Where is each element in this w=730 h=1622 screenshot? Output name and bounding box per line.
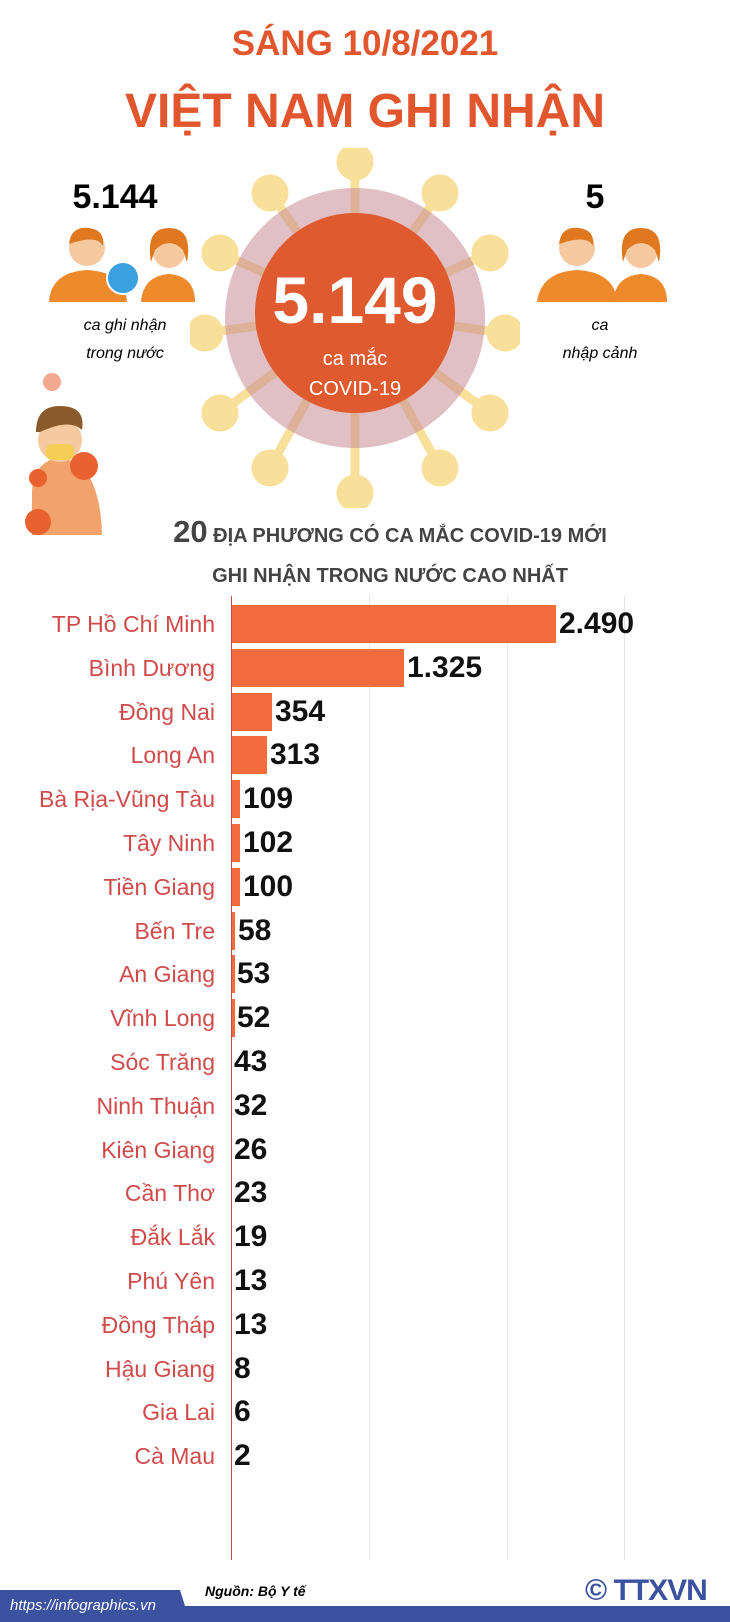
bars: 354 [275, 695, 325, 728]
bars: Tiền Giang [103, 874, 215, 900]
bars: 2.490 [559, 607, 634, 640]
bars: Sóc Trăng [110, 1049, 215, 1075]
bars: 6 [234, 1395, 251, 1428]
bars: 13 [234, 1308, 267, 1341]
logo: TTXVN: © TTXVN [585, 1574, 707, 1607]
bars: 52 [237, 1001, 270, 1034]
bars: 32 [234, 1089, 267, 1122]
bars: 313 [270, 738, 320, 771]
footer url tab [0, 1590, 185, 1613]
bars: 2 [234, 1439, 251, 1472]
bars: Đồng Nai [119, 699, 215, 725]
bars: Bến Tre [134, 918, 215, 944]
bars: 8 [234, 1352, 251, 1385]
bars: 58 [238, 914, 271, 947]
total caption: ca mắc [323, 348, 387, 370]
title: main: VIỆT NAM GHI NHẬN [125, 85, 605, 138]
bars: Ninh Thuận [96, 1093, 215, 1119]
total caption [309, 347, 401, 400]
virus graphic with total [190, 148, 520, 508]
bars: 26 [234, 1133, 267, 1166]
bars: 19 [234, 1220, 267, 1253]
bars: Long An [131, 742, 215, 768]
bars: 102 [243, 826, 293, 859]
bars: 13 [234, 1264, 267, 1297]
domestic caption: trong nước [86, 345, 164, 362]
footer url tab: https://infographics.vn [10, 1597, 156, 1614]
domestic caption: ca ghi nhận [84, 317, 166, 334]
bars: 53 [237, 957, 270, 990]
bars: Bình Dương [89, 655, 215, 681]
bars: Đắk Lắk [131, 1224, 215, 1250]
icon: imported people [537, 228, 667, 302]
title: date: SÁNG 10/8/2021 [232, 24, 498, 63]
bars: 100 [243, 870, 293, 903]
bars: Tây Ninh [123, 830, 215, 856]
bars: Đồng Tháp [102, 1312, 215, 1338]
bars: Cà Mau [134, 1443, 215, 1469]
bar chart [231, 596, 625, 1560]
chart heading: 20 ĐỊA PHƯƠNG CÓ CA MẮC COVID-19 MỚI [173, 514, 607, 549]
bars: 43 [234, 1045, 267, 1078]
bars: Gia Lai [142, 1399, 215, 1425]
imported caption [562, 317, 637, 362]
imported caption: ca [592, 317, 608, 334]
bars: Kiên Giang [101, 1137, 215, 1163]
bars: TP Hồ Chí Minh [52, 611, 215, 637]
imported caption: nhập cảnh [563, 345, 637, 362]
bars: Phú Yên [127, 1268, 215, 1294]
chart heading [173, 514, 607, 587]
chart heading: GHI NHẬN TRONG NƯỚC CAO NHẤT [212, 565, 568, 587]
bars: An Giang [119, 961, 215, 987]
total caption: COVID-19 [309, 378, 401, 400]
domestic number: 5.144 [72, 178, 158, 216]
domestic caption [84, 317, 166, 362]
bars: 109 [243, 782, 293, 815]
bars: Bà Rịa-Vũng Tàu [39, 786, 215, 812]
icon: sick person [25, 373, 102, 535]
imported number: 5 [586, 178, 604, 216]
icon: domestic people [49, 228, 195, 302]
total number: 5.149 [272, 263, 438, 337]
source: Nguồn: Bộ Y tế [205, 1583, 306, 1599]
bars: 1.325 [407, 651, 482, 684]
footer bar [0, 1606, 730, 1622]
bars: Cần Thơ [125, 1180, 215, 1206]
bars: 23 [234, 1176, 267, 1209]
bars: Vĩnh Long [110, 1005, 215, 1031]
bars: Hậu Giang [105, 1356, 215, 1382]
